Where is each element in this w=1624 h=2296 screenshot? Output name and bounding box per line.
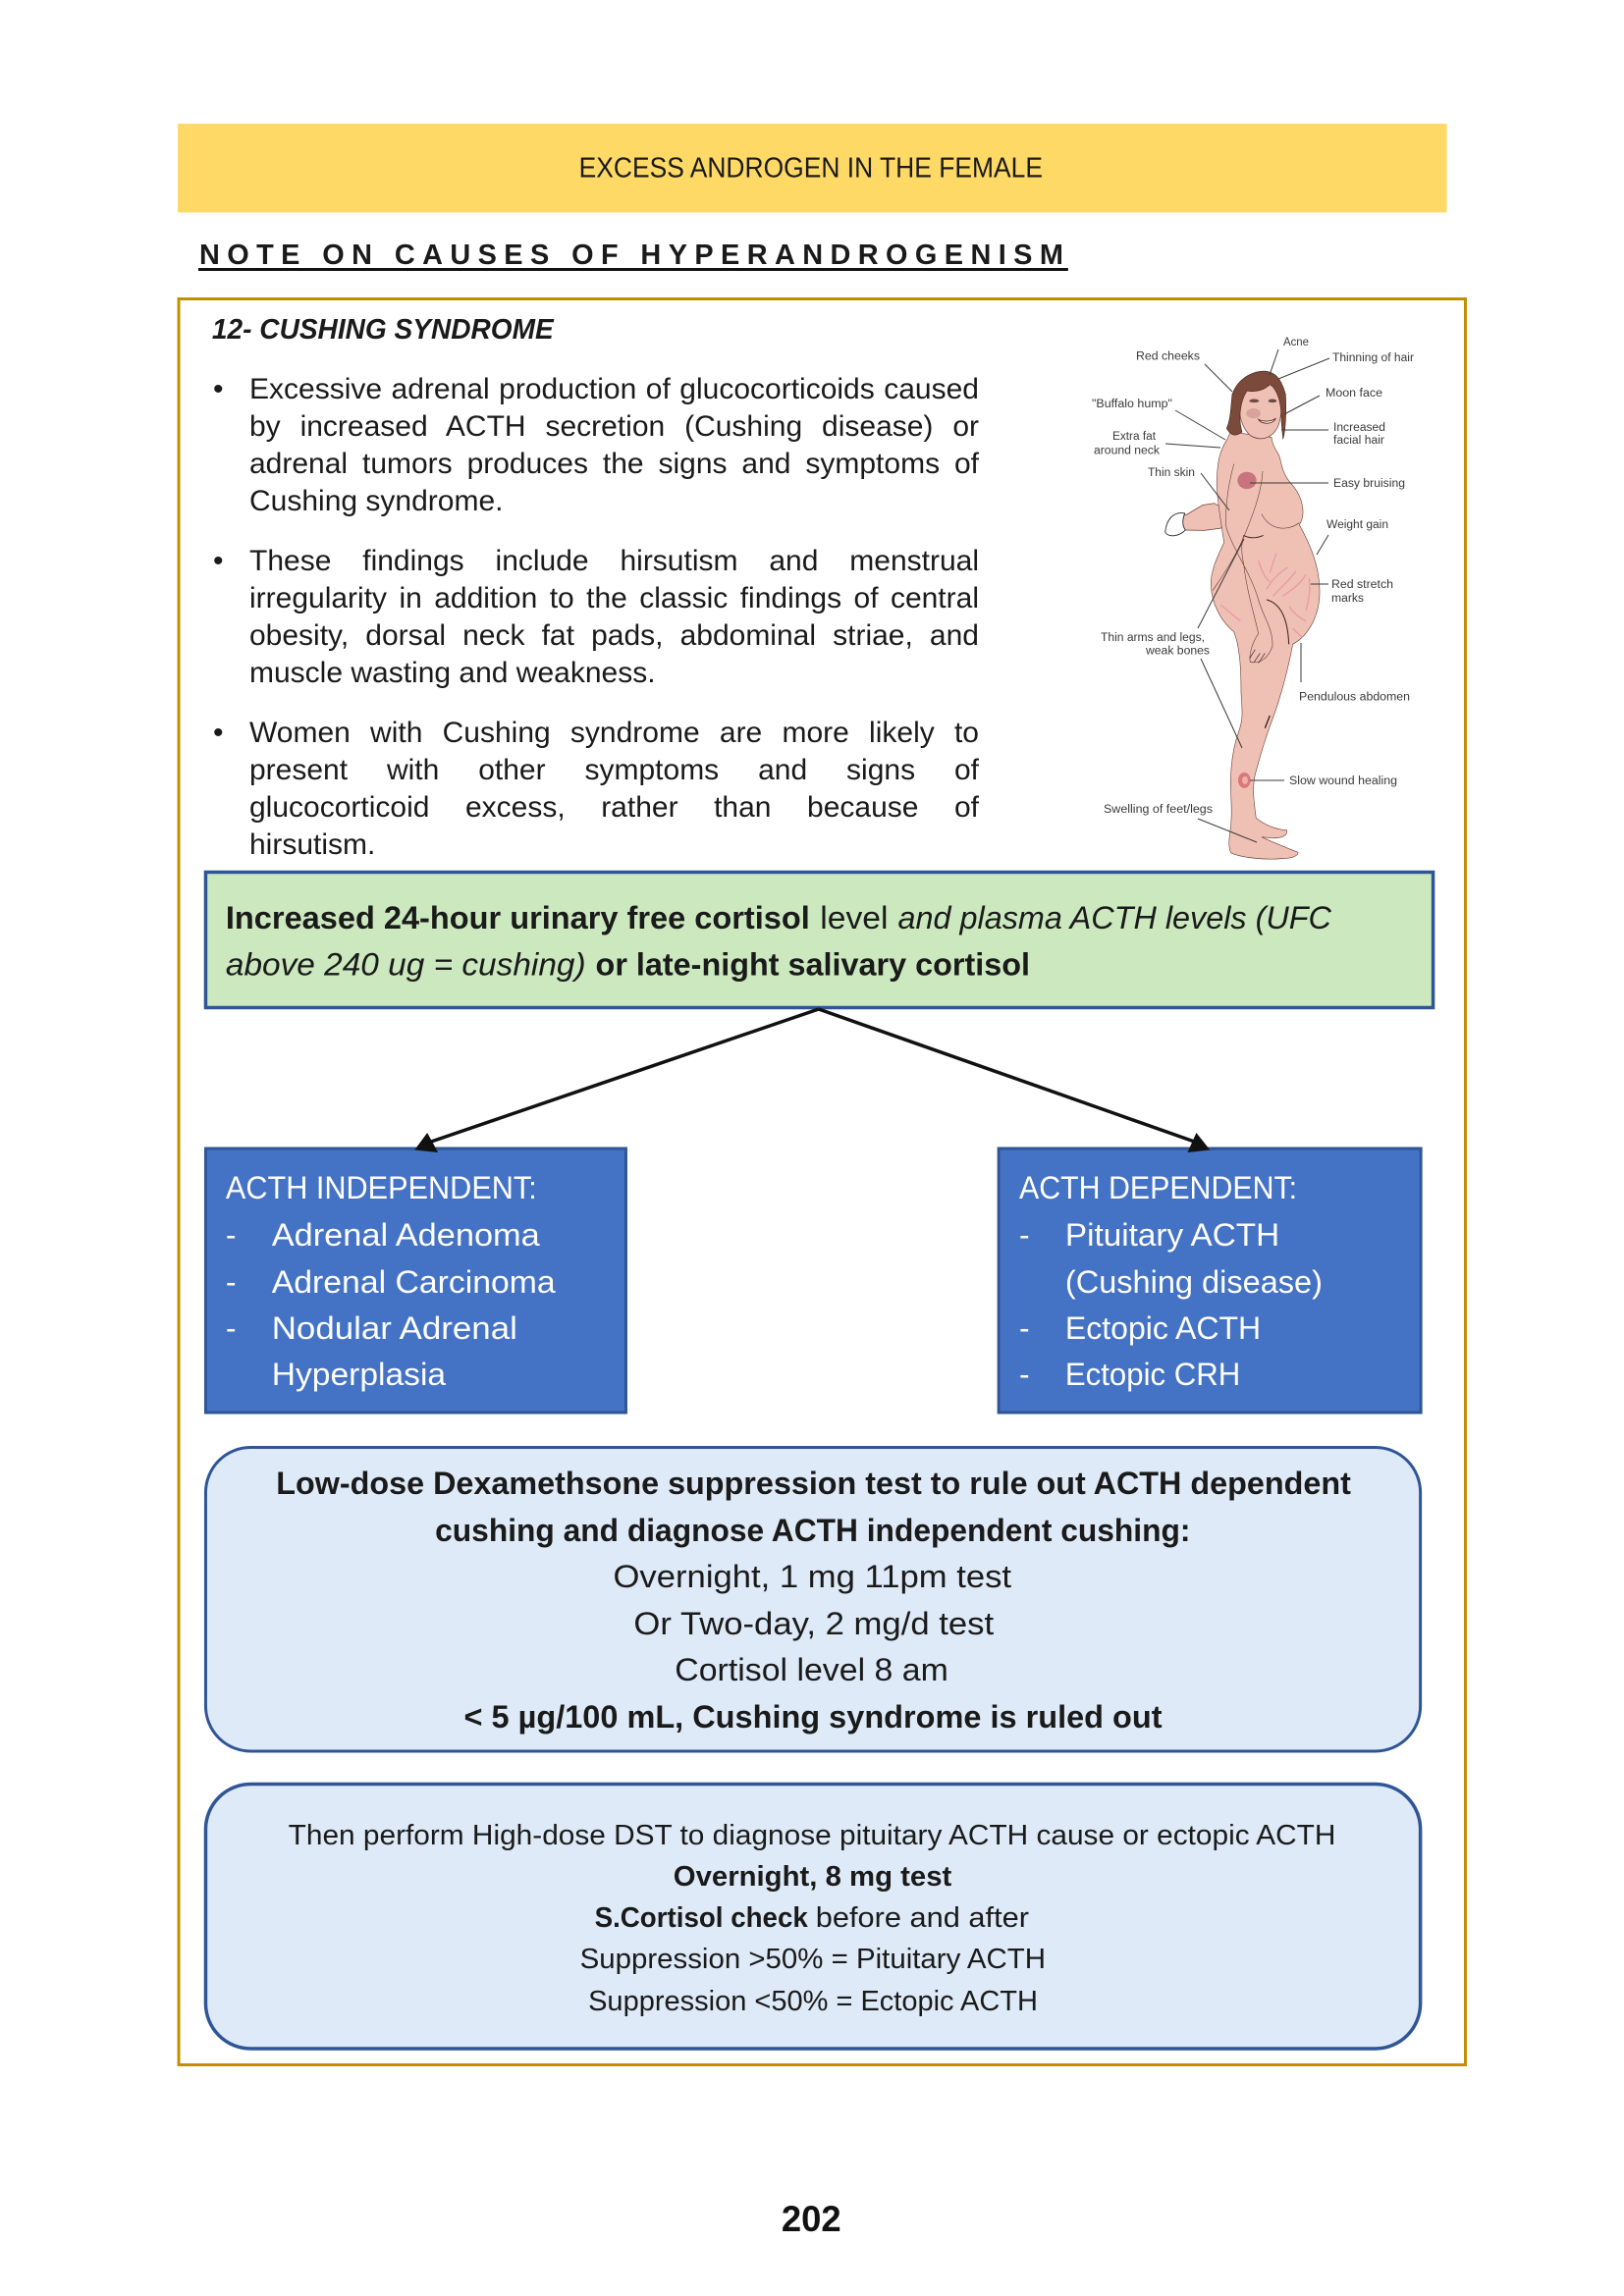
wound <box>1238 773 1251 788</box>
panel: urinary cortisol test: Increased 24-hour urinary free cortisol <box>226 900 810 935</box>
bullet 2: irregularity in addition to the classic findings of central <box>249 582 979 614</box>
head and hair <box>1226 371 1286 439</box>
figure labels: Red cheeks <box>1136 349 1200 363</box>
figure labels: facial hair <box>1333 433 1384 447</box>
section heading: NOTE ON CAUSES OF HYPERANDROGENISM <box>199 240 1063 271</box>
arrow: to ACTH dependent <box>819 1009 1210 1152</box>
panel: urinary cortisol test: level <box>820 900 889 935</box>
panel: ACTH independent causes: - <box>226 1217 237 1253</box>
panel: ACTH dependent causes: Ectopic ACTH <box>1065 1310 1261 1346</box>
bullet 2: These findings include hirsutism and menstrual <box>249 545 979 577</box>
bullet 2 <box>213 545 979 689</box>
figure labels: Increased <box>1333 420 1385 434</box>
figure labels <box>1092 335 1414 816</box>
bullet 2: muscle wasting and weakness. <box>249 657 656 689</box>
panel: low-dose dexamethasone suppression test <box>205 1447 1421 1751</box>
panel: ACTH dependent causes: Pituitary ACTH <box>1065 1217 1279 1253</box>
bullet 3: • <box>213 717 224 749</box>
panel: high-dose dexamethasone suppression test <box>205 1785 1421 2049</box>
bullet 1: adrenal tumors produces the signs and symptoms of <box>249 448 979 480</box>
bullet 1: Excessive adrenal production of glucocorticoids caused <box>249 373 979 405</box>
figure labels: Slow wound healing <box>1289 774 1397 787</box>
panel: high-dose dexamethasone suppression test: before and after <box>816 1902 1029 1934</box>
panel: low-dose dexamethasone suppression test: < 5 µg/100 mL, Cushing syndrome is ruled out <box>464 1699 1163 1735</box>
body silhouette <box>1165 371 1320 859</box>
panel: high-dose dexamethasone suppression test: Then perform High-dose DST to diagnose pituitary ACTH cause or ectopic ACTH <box>289 1820 1335 1851</box>
panel: ACTH independent causes: Adrenal Carcinoma <box>272 1264 556 1300</box>
figure labels: marks <box>1331 591 1364 605</box>
panel: high-dose dexamethasone suppression test: S.Cortisol check <box>595 1902 809 1934</box>
bruise <box>1237 472 1257 489</box>
panel: urinary cortisol test: or late-night salivary cortisol <box>596 946 1030 983</box>
panel: urinary cortisol test: above 240 ug = cushing) <box>226 946 586 983</box>
panel heading: 12- CUSHING SYNDROME <box>212 314 555 346</box>
bullet 3: Women with Cushing syndrome are more likely to <box>249 717 979 749</box>
panel: ACTH independent causes: ACTH INDEPENDENT: <box>226 1170 537 1205</box>
panel: high-dose dexamethasone suppression test: Suppression <50% = Ectopic ACTH <box>588 1986 1038 2017</box>
panel: low-dose dexamethasone suppression test: Or Two-day, 2 mg/d test <box>633 1606 994 1641</box>
arrow: to ACTH independent <box>414 1009 819 1152</box>
panel: ACTH independent causes <box>205 1148 625 1413</box>
panel: ACTH independent causes: Nodular Adrenal <box>272 1310 517 1346</box>
bullet 3 <box>213 717 979 861</box>
panel: high-dose dexamethasone suppression test: Overnight, 8 mg test <box>674 1861 952 1893</box>
panel: urinary cortisol test <box>205 872 1434 1007</box>
figure labels: Swelling of feet/legs <box>1104 802 1213 816</box>
bullet 1 <box>213 373 979 517</box>
figure labels: Pendulous abdomen <box>1299 689 1410 704</box>
panel: ACTH dependent causes <box>999 1148 1421 1413</box>
panel: low-dose dexamethasone suppression test: cushing and diagnose ACTH independent cushing: <box>435 1513 1190 1548</box>
header banner: EXCESS ANDROGEN IN THE FEMALE <box>579 152 1043 185</box>
panel: ACTH independent causes: - <box>226 1310 237 1346</box>
panel: ACTH independent causes: Adrenal Adenoma <box>272 1217 540 1253</box>
panel: ACTH dependent causes: ACTH DEPENDENT: <box>1019 1170 1297 1205</box>
medical figure: signs and symptoms of Cushing syndrome <box>1092 335 1414 859</box>
figure labels: Moon face <box>1326 386 1382 400</box>
panel: high-dose dexamethasone suppression test: Suppression >50% = Pituitary ACTH <box>580 1944 1046 1975</box>
bullet 3: glucocorticoid excess, rather than because of <box>249 791 979 824</box>
panel: urinary cortisol test: and plasma ACTH levels (UFC <box>897 900 1332 935</box>
panel: low-dose dexamethasone suppression test: Overnight, 1 mg 11pm test <box>614 1559 1011 1594</box>
figure labels: Thin skin <box>1148 465 1195 479</box>
panel: low-dose dexamethasone suppression test: Cortisol level 8 am <box>675 1652 948 1687</box>
bullet 3: hirsutism. <box>249 828 375 861</box>
panel: ACTH dependent causes: (Cushing disease) <box>1065 1264 1323 1300</box>
figure labels: Easy bruising <box>1333 476 1405 490</box>
figure labels: Thinning of hair <box>1332 350 1414 364</box>
figure labels: weak bones <box>1145 644 1210 658</box>
header banner <box>178 124 1447 212</box>
panel: ACTH independent causes: Hyperplasia <box>272 1357 446 1392</box>
figure labels: "Buffalo hump" <box>1092 397 1172 410</box>
bullet 1: • <box>213 373 224 405</box>
bullet 2: • <box>213 545 224 577</box>
panel: ACTH dependent causes: - <box>1019 1217 1030 1253</box>
figure labels: Red stretch <box>1331 577 1393 591</box>
figure labels: Thin arms and legs, <box>1101 630 1205 644</box>
figure labels: Weight gain <box>1326 517 1388 531</box>
figure labels: Acne <box>1283 335 1309 348</box>
bullet 1: by increased ACTH secretion (Cushing disease) or <box>249 410 979 443</box>
panel: ACTH independent causes: - <box>226 1264 237 1300</box>
panel: ACTH dependent causes: - <box>1019 1357 1030 1392</box>
panel: low-dose dexamethasone suppression test: Low-dose Dexamethsone suppression test to rule out ACTH dependent <box>276 1466 1351 1501</box>
figure labels: around neck <box>1094 444 1161 457</box>
leader lines <box>1165 349 1329 842</box>
bullet 3: present with other symptoms and signs of <box>249 754 979 786</box>
bullet 1: Cushing syndrome. <box>249 485 503 517</box>
bullet list: clinical findings <box>213 373 979 861</box>
panel: ACTH dependent causes: Ectopic CRH <box>1065 1357 1240 1392</box>
page number: 202 <box>782 2199 841 2239</box>
bullet 2: obesity, dorsal neck fat pads, abdominal striae, and <box>249 619 979 652</box>
panel: Cushing syndrome frame <box>179 298 1465 2065</box>
figure labels: Extra fat <box>1112 429 1157 443</box>
panel: ACTH dependent causes: - <box>1019 1310 1030 1346</box>
